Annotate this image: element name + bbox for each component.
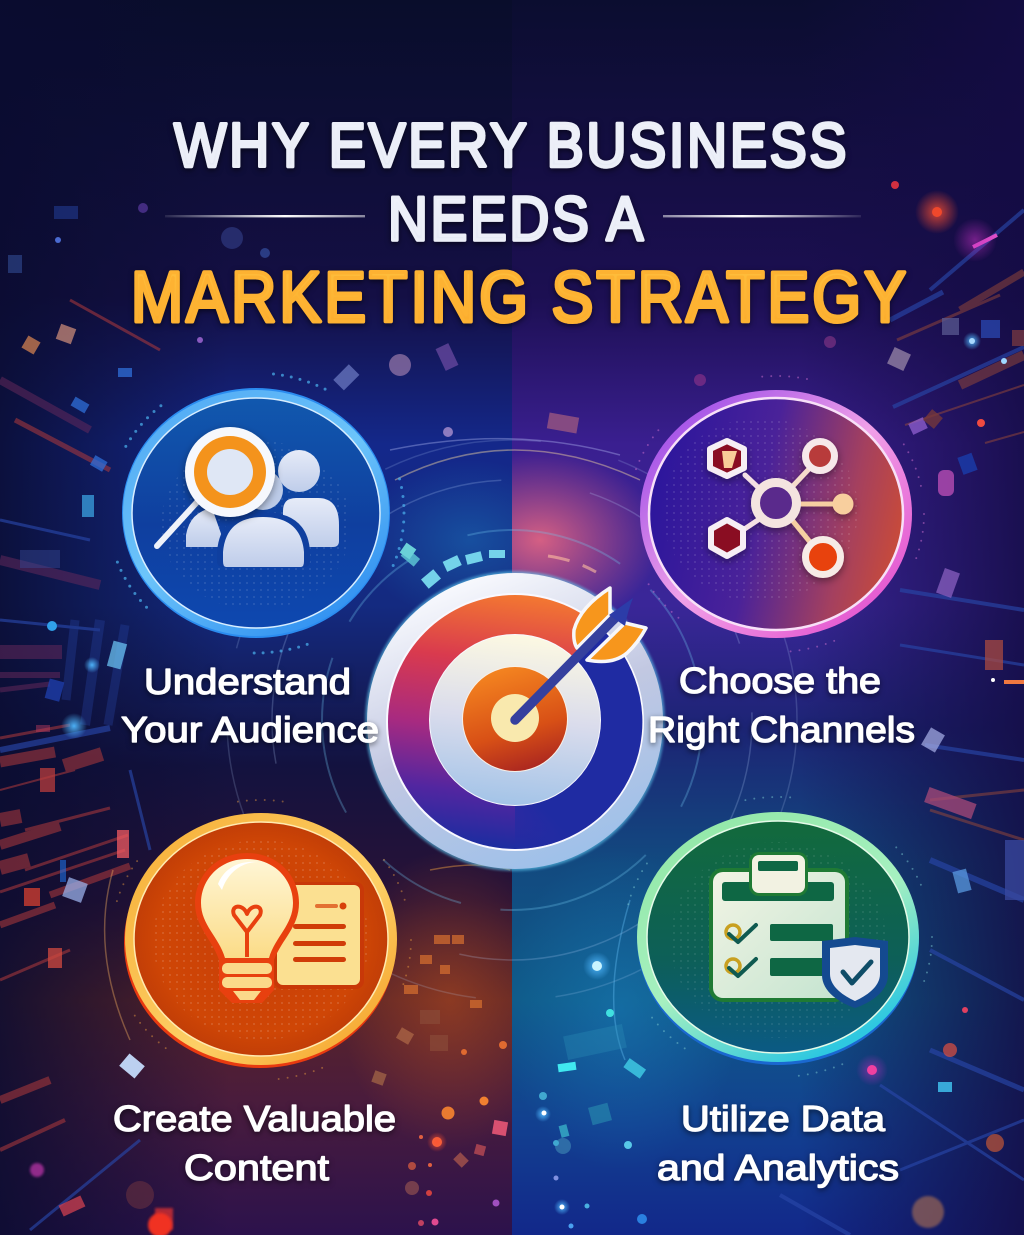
title: MARKETING STRATEGY bbox=[131, 258, 909, 337]
icon: clipboard checklist and shield bbox=[709, 852, 888, 1008]
label: utilize data and analytics: and Analytics bbox=[657, 1147, 899, 1188]
target tick marks bbox=[401, 548, 505, 589]
label: choose the right channels bbox=[648, 660, 915, 750]
badge: understand your audience bbox=[108, 373, 404, 653]
label: create valuable content bbox=[113, 1098, 396, 1188]
icon: lightbulb and document bbox=[195, 853, 364, 1003]
label: understand your audience: Your Audience bbox=[121, 709, 379, 750]
concentric arcs around target bbox=[105, 439, 797, 1060]
label: utilize data and analytics bbox=[657, 1098, 899, 1188]
icon: audience with magnifier bbox=[157, 427, 339, 567]
title bbox=[131, 112, 909, 337]
label: create valuable content: Content bbox=[184, 1147, 329, 1188]
arrow bbox=[515, 588, 646, 720]
badge: utilize data and analytics bbox=[624, 797, 932, 1077]
title: WHY EVERY BUSINESS bbox=[174, 112, 849, 180]
label: understand your audience: Understand bbox=[144, 661, 351, 702]
label: choose the right channels: Choose the bbox=[679, 660, 881, 701]
badge: create valuable content bbox=[111, 800, 411, 1080]
label: utilize data and analytics: Utilize Data bbox=[681, 1098, 886, 1139]
label: choose the right channels: Right Channels bbox=[648, 709, 915, 750]
title: NEEDS A bbox=[388, 185, 646, 254]
badge: choose the right channels bbox=[628, 376, 924, 652]
title rules bbox=[165, 215, 861, 217]
central target with arrow bbox=[365, 571, 665, 871]
icon: channel network bbox=[710, 441, 854, 574]
label: understand your audience bbox=[121, 661, 379, 750]
label: create valuable content: Create Valuable bbox=[113, 1098, 396, 1139]
